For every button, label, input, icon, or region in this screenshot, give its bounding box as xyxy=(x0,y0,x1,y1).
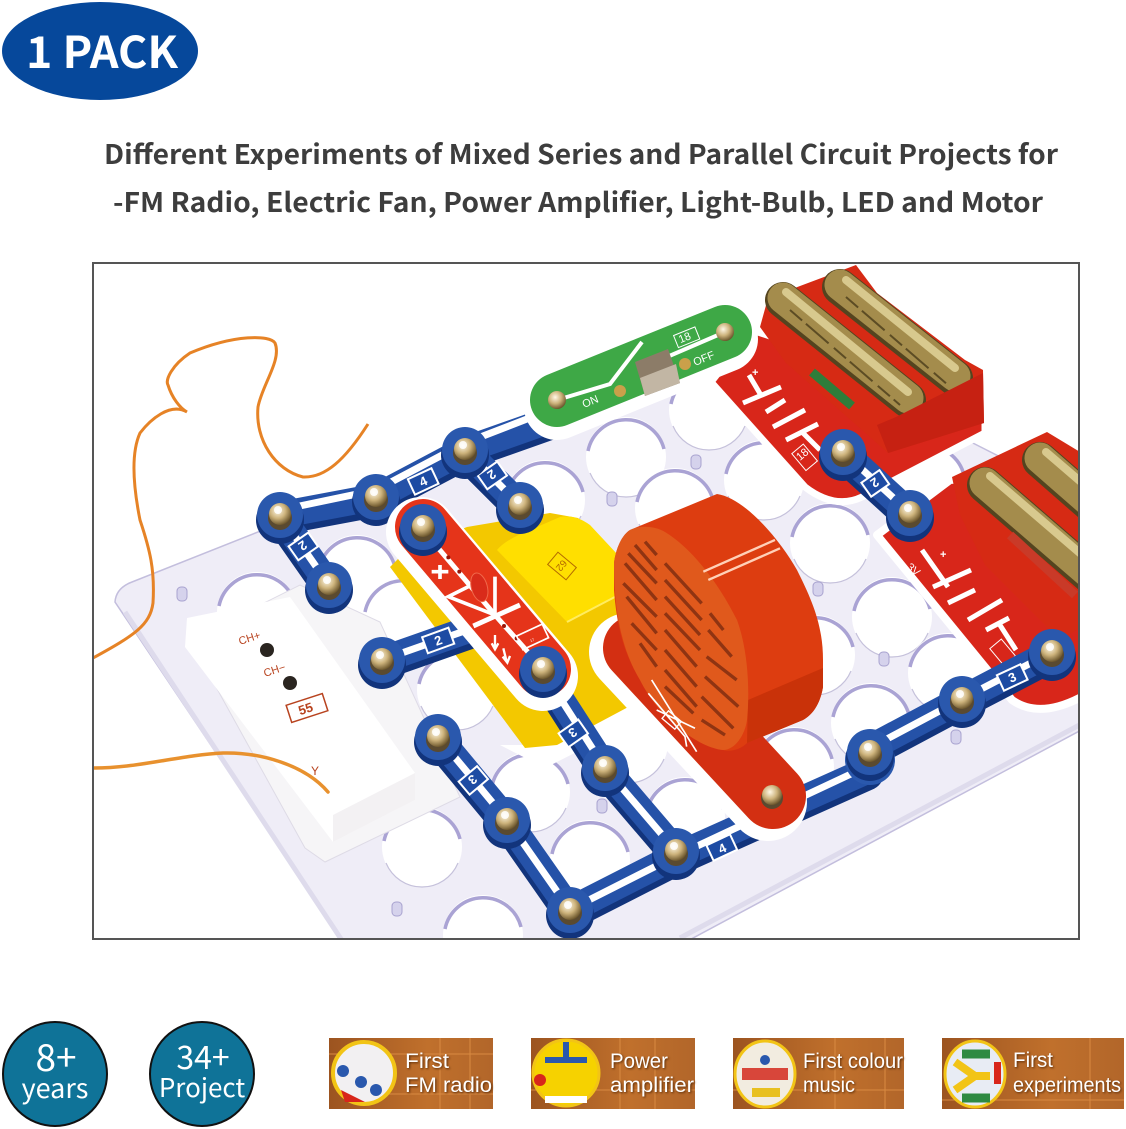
blue connector: 3 right: 3 xyxy=(1006,669,1019,686)
heading: -FM Radio, Electric Fan, Power Amplifier, Light-Bulb, LED and Motor xyxy=(113,181,1043,220)
battery pack lower: + xyxy=(940,549,946,561)
blue connector: 2 top: 2 xyxy=(484,466,499,483)
blue connector: 4 bottom: 4 xyxy=(716,840,729,857)
heading xyxy=(104,133,1058,220)
badge: 34+ project: Project xyxy=(159,1068,245,1105)
blue connector: 3 lower left: 3 xyxy=(465,772,480,788)
banner: power amplifier: amplifier xyxy=(610,1074,694,1097)
white radio module 55 xyxy=(185,585,460,862)
blue connector: 4 bottom xyxy=(546,766,868,939)
banner: first colour music: music xyxy=(803,1074,855,1097)
banner: first colour music: First colour xyxy=(803,1050,903,1073)
banner: power amplifier: Power xyxy=(610,1050,668,1073)
green slide switch 18: 18 xyxy=(677,330,693,346)
yellow component block 62: 62 xyxy=(553,557,569,573)
battery pack upper: + xyxy=(752,367,758,379)
orange wire, upper xyxy=(93,338,368,658)
green slide switch 18: ON xyxy=(581,393,600,411)
white radio module 55: Y xyxy=(311,764,319,778)
battery pack lower: 3V xyxy=(904,561,923,579)
blue connector: 4 top xyxy=(280,412,550,526)
banner: first experiments: experiments xyxy=(1013,1074,1121,1097)
badge: 8+ years: years xyxy=(22,1067,88,1106)
white radio module 55: CH− xyxy=(262,662,287,680)
battery pack lower xyxy=(877,432,1095,709)
banner: power amplifier xyxy=(531,1038,695,1109)
blue connector: 2 left: 2 xyxy=(295,537,310,554)
badge: 8+ years xyxy=(3,1022,107,1126)
battery pack upper xyxy=(711,265,985,502)
blue connector: 2 middle: 2 xyxy=(432,632,444,649)
blue connector: small link on batteries xyxy=(819,429,934,542)
panel: circuit kit photo illustration xyxy=(93,263,1095,975)
badge: 1 pack xyxy=(2,2,198,100)
blue connector: 2 middle xyxy=(358,622,474,689)
red speaker component xyxy=(614,494,823,809)
green slide switch 18: OFF xyxy=(692,349,717,369)
white radio module 55: 55 xyxy=(296,699,315,718)
battery pack upper: 18 xyxy=(794,446,811,463)
blue connector: 2 top xyxy=(441,427,544,534)
blue connector: 4 top: 4 xyxy=(417,473,430,490)
banner: first FM radio: FM radio xyxy=(405,1074,492,1097)
yellow component block 62 xyxy=(390,513,640,768)
blue connector: 3 centre: 3 xyxy=(565,724,580,741)
blue connector: 2 left xyxy=(256,492,353,614)
heading: Different Experiments of Mixed Series and Parallel Circuit Projects for xyxy=(104,133,1058,172)
badge: 34+ project xyxy=(150,1022,254,1126)
blue connector: 3 right xyxy=(845,629,1076,785)
clear plastic base board xyxy=(114,394,1078,938)
orange wire, lower xyxy=(93,753,328,792)
badge: 1 pack: 1 PACK xyxy=(26,17,179,81)
banner: first experiments: First xyxy=(1013,1049,1053,1072)
banner: first experiments xyxy=(942,1038,1124,1109)
red LED component 17 xyxy=(399,504,567,698)
badge: 34+ project: 34+ xyxy=(176,1033,230,1079)
red LED component 17: 17 xyxy=(530,638,535,643)
blue connector: 3 lower left xyxy=(414,714,570,915)
banner: first colour music xyxy=(733,1038,904,1109)
badge: 8+ years: 8+ xyxy=(35,1028,77,1082)
blue connector: small link on batteries: 2 xyxy=(867,474,882,491)
white radio module 55: CH+ xyxy=(237,630,262,648)
blue connector: 3 centre xyxy=(547,694,700,880)
banner: first FM radio: First xyxy=(405,1050,449,1073)
green slide switch 18 xyxy=(548,323,734,411)
banner: first FM radio xyxy=(329,1038,493,1109)
